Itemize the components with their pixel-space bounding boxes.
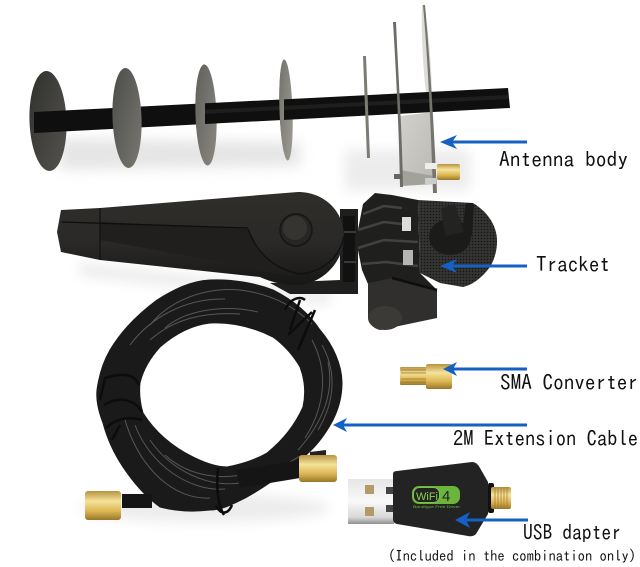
large reflector discs bbox=[393, 22, 403, 187]
mounting bracket bbox=[400, 112, 436, 184]
SMA connector on antenna bbox=[394, 163, 460, 184]
coiled cable bbox=[97, 280, 342, 511]
left SMA plug bbox=[85, 491, 152, 520]
square boom bbox=[34, 88, 510, 133]
antenna body bbox=[28, 5, 510, 193]
SMA converter bbox=[400, 364, 452, 389]
folding arm bbox=[57, 192, 344, 285]
label: USB adapter: USB dapter bbox=[523, 522, 621, 543]
arrow: SMA converter bbox=[443, 362, 527, 376]
WiFi 4 logo: WiFi bbox=[416, 491, 438, 503]
label: SMA converter: SMA Converter bbox=[500, 372, 638, 393]
USB metal plug bbox=[348, 479, 394, 524]
USB adapter bbox=[348, 462, 511, 536]
arrow: extension cable bbox=[333, 418, 527, 432]
antenna shadows bbox=[60, 138, 470, 190]
label: combination note: (Included in the combination only) bbox=[388, 548, 636, 563]
extension cable bbox=[85, 280, 342, 520]
label: 2M extension cable: 2M Extension Cable bbox=[453, 428, 638, 449]
stand shadow bbox=[80, 262, 330, 305]
adapter SMA jack bbox=[488, 483, 494, 513]
WiFi 4 logo bbox=[412, 486, 461, 509]
cable shadow bbox=[80, 494, 330, 522]
mesh plate bbox=[418, 200, 497, 287]
label: tracket: Tracket bbox=[536, 254, 610, 275]
arrow: antenna body bbox=[440, 135, 527, 149]
discs behind boom bbox=[28, 70, 68, 172]
WiFi 4 logo: 4 bbox=[442, 488, 450, 505]
tracket stand bbox=[57, 192, 497, 330]
inner reflector face bbox=[422, 5, 432, 92]
right SMA plug bbox=[236, 450, 337, 488]
WiFi 4 logo: Bandtype Free Driver bbox=[413, 504, 461, 509]
cable ties bbox=[100, 298, 315, 515]
arrow: tracket bbox=[440, 259, 527, 273]
dongle body bbox=[393, 462, 488, 536]
arrow: USB adapter bbox=[455, 512, 528, 528]
mount post bbox=[429, 203, 474, 255]
lower block bbox=[368, 278, 437, 330]
arm knob bbox=[280, 214, 312, 246]
hinge bbox=[356, 193, 437, 290]
base plate bbox=[270, 209, 358, 294]
label: antenna body: Antenna body bbox=[499, 149, 628, 170]
cable highlights bbox=[125, 290, 332, 498]
discs over boom bbox=[111, 68, 143, 168]
